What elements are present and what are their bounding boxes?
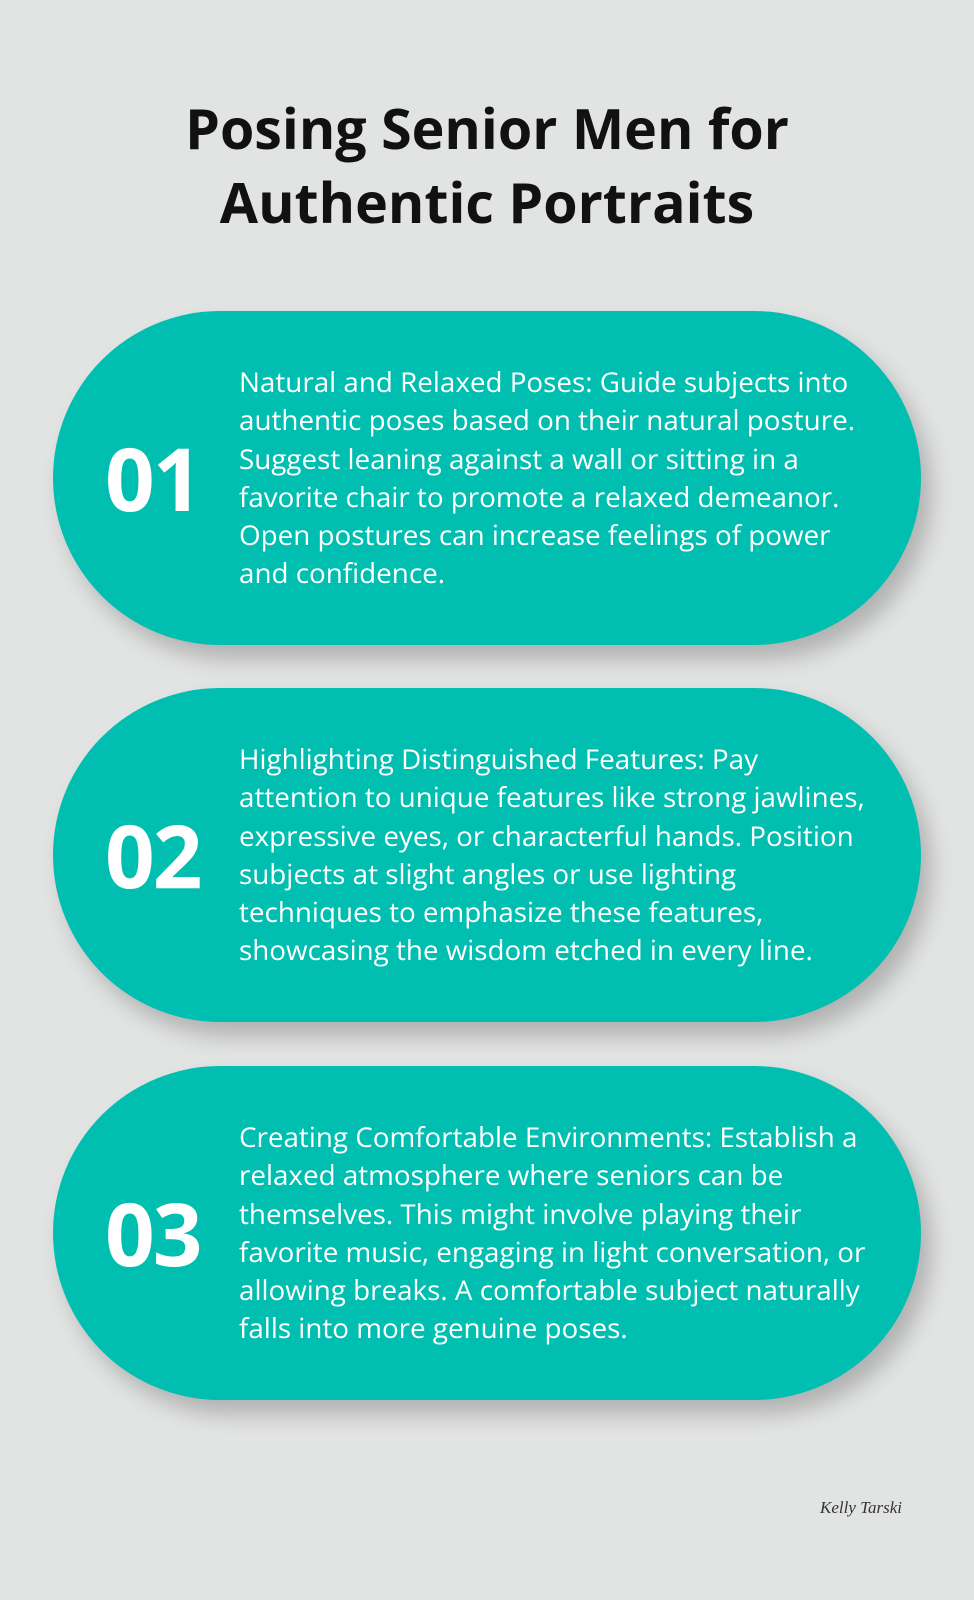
text 03: Creating Comfortable Environments: Establish a relaxed atmosphere where seniors can be themselves. This might involve playing their favorite music, engaging in light conversation, or allowing breaks. A comfortable subject naturally falls into more genuine poses. [239, 1118, 865, 1347]
title [185, 91, 789, 240]
number 03: 03 [105, 1174, 200, 1292]
text 02: Highlighting Distinguished Features: Pay attention to unique features like strong jawlines, expressive eyes, or characterful hands. Position subjects at slight angles or use lighting techniques to emphasize these features, showcasing the wisdom etched in every line. [239, 740, 865, 969]
panel: 02 [53, 688, 921, 1022]
panel: 03 [53, 1066, 921, 1400]
number 02: 02 [105, 796, 200, 914]
number 01: 01 [105, 419, 200, 537]
panel: 01 [53, 311, 921, 645]
title: Authentic Portraits [220, 165, 754, 240]
text 01: Natural and Relaxed Poses: Guide subjects into authentic poses based on their natural posture. Suggest leaning against a wall or sitting in a favorite chair to promote a relaxed demeanor. Open postures can increase feelings of power and confidence. [239, 363, 855, 592]
title: Posing Senior Men for [185, 91, 789, 166]
signature logo: Kelly Tarski [820, 1498, 902, 1517]
